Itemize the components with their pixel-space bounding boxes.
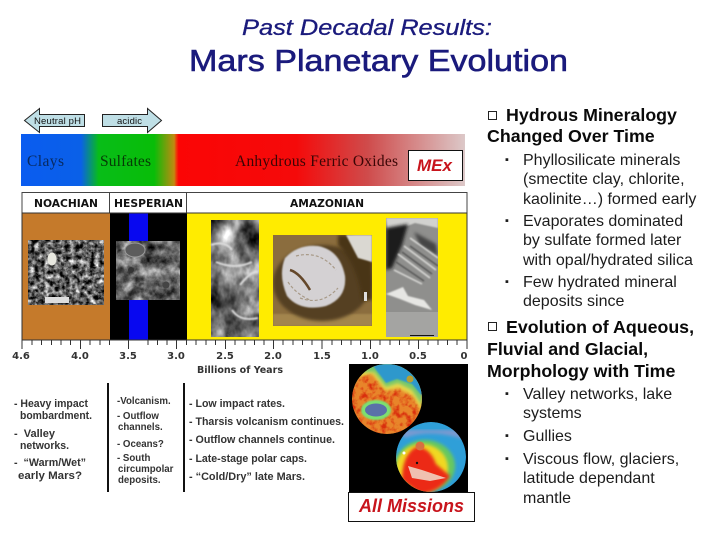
time axis	[12, 340, 468, 376]
Amazonian notes: - “Cold/Dry” late Mars.	[189, 471, 305, 483]
time axis: 4.0	[71, 351, 89, 362]
Hesperian notes: circumpolar	[118, 464, 174, 475]
photo: Amazonian gullies	[386, 218, 438, 337]
era divider lines	[107, 383, 185, 492]
era bands	[22, 213, 467, 340]
era label: HESPERIAN: HESPERIAN	[114, 198, 183, 210]
bullets: hydrous mineralogy: with opal/hydrated silica	[523, 252, 693, 269]
callout: All Missions: All Missions	[358, 496, 464, 516]
Hesperian notes	[117, 396, 174, 486]
time axis: 3.5	[119, 351, 137, 362]
bullets: morphology: ▪	[505, 430, 509, 442]
bullets: morphology: systems	[523, 405, 582, 422]
bullets: hydrous mineralogy: ▪	[505, 276, 509, 288]
era header row	[22, 192, 467, 214]
Amazonian notes: - Tharsis volcanism continues.	[189, 416, 344, 428]
bullets: hydrous mineralogy: Few hydrated mineral	[523, 274, 677, 291]
Hesperian notes: - South	[117, 453, 150, 464]
Amazonian notes: - Late-stage polar caps.	[189, 453, 307, 465]
photo: Amazonian flow features	[211, 220, 259, 337]
globes panel	[349, 364, 468, 494]
bullets: hydrous mineralogy: ▪	[505, 215, 509, 227]
bullets: morphology: Gullies	[523, 428, 572, 445]
bullets: hydrous mineralogy: by sulfate formed later	[523, 232, 681, 249]
Noachian notes: networks.	[20, 440, 69, 452]
time axis: 2.0	[264, 351, 282, 362]
arrow: acidic	[102, 108, 162, 132]
Hesperian notes: - Outflow	[117, 411, 159, 422]
heading: Hydrous Mineralogy: Hydrous Mineralogy	[506, 105, 677, 125]
heading: Evolution of Aqueous	[487, 317, 694, 381]
Noachian notes: bombardment.	[20, 410, 92, 422]
heading: Hydrous Mineralogy	[487, 105, 677, 146]
bullets: hydrous mineralogy: (smectite clay, chlorite,	[523, 171, 685, 188]
bullets: hydrous mineralogy: kaolinite…) formed early	[523, 191, 696, 208]
bullets: morphology: ▪	[505, 453, 509, 465]
era label: NOACHIAN: NOACHIAN	[34, 198, 98, 210]
photo: Amazonian polar cap	[273, 235, 372, 326]
era label: AMAZONIAN: AMAZONIAN	[290, 198, 364, 210]
Noachian notes: - “Warm/Wet”	[14, 457, 86, 469]
bullets: morphology: latitude dependant	[523, 470, 655, 487]
heading: Evolution of Aqueous: Morphology with Time	[487, 361, 675, 381]
bullets: morphology: mantle	[523, 490, 571, 507]
Hesperian notes: -Volcanism.	[117, 396, 171, 407]
time axis: 0	[461, 351, 468, 362]
globe: Tharsis hemisphere	[395, 422, 466, 494]
axis title: Billions of Years	[197, 365, 283, 376]
Amazonian notes: - Low impact rates.	[189, 398, 285, 410]
photo: Noachian cratered terrain	[28, 240, 104, 305]
bullets: hydrous mineralogy: Evaporates dominated	[523, 213, 683, 230]
Hesperian notes: channels.	[118, 422, 163, 433]
bullets: morphology	[505, 386, 679, 507]
Amazonian notes	[189, 398, 344, 483]
Noachian notes: early Mars?	[18, 470, 82, 482]
Amazonian notes: - Outflow channels continue.	[189, 434, 335, 446]
time axis: 0.5	[409, 351, 427, 362]
heading: Evolution of Aqueous: Evolution of Aqueous,	[506, 317, 694, 337]
Noachian notes	[14, 398, 92, 482]
arrow: Neutral pH: Neutral pH	[34, 116, 81, 127]
callout: MEx: MEx	[417, 156, 454, 175]
callout: MEx	[408, 150, 462, 180]
bullets: hydrous mineralogy: ▪	[505, 154, 509, 166]
label: Clays: Clays	[27, 153, 64, 170]
bullets: hydrous mineralogy: Phyllosilicate minerals	[523, 152, 680, 169]
bullets: hydrous mineralogy	[505, 152, 696, 310]
time axis: 1.5	[313, 351, 331, 362]
time axis: 1.0	[361, 351, 379, 362]
label: Sulfates: Sulfates	[100, 153, 151, 170]
mineral gradient bar	[21, 134, 465, 186]
time axis: 3.0	[167, 351, 185, 362]
globe: southern hemisphere	[352, 364, 422, 434]
bullets: morphology: ▪	[505, 388, 509, 400]
photo: Hesperian volcanic plains	[116, 241, 180, 300]
bullets: morphology: Viscous flow, glaciers,	[523, 451, 679, 468]
main title line: Mars Planetary Evolution	[189, 43, 568, 78]
Hesperian notes: deposits.	[118, 475, 161, 486]
time axis: 2.5	[216, 351, 234, 362]
Noachian notes: - Valley	[14, 428, 56, 440]
Hesperian notes: - Oceans?	[117, 439, 164, 450]
title	[189, 15, 568, 78]
heading: Evolution of Aqueous: Fluvial and Glacial,	[487, 339, 648, 359]
Noachian notes: - Heavy impact	[14, 398, 88, 410]
bullets: morphology: Valley networks, lake	[523, 386, 672, 403]
callout: All Missions	[348, 492, 474, 522]
arrow: acidic: acidic	[117, 116, 142, 127]
heading: Hydrous Mineralogy: Changed Over Time	[487, 126, 655, 146]
label: Anhydrous Ferric Oxides: Anhydrous Ferric Oxides	[235, 153, 398, 170]
timeline graphic	[12, 18, 566, 522]
subtitle line: Past Decadal Results:	[242, 15, 492, 40]
time axis: 4.6	[12, 351, 30, 362]
arrow: Neutral pH	[24, 108, 84, 132]
bullets: hydrous mineralogy: deposits since	[523, 293, 624, 310]
